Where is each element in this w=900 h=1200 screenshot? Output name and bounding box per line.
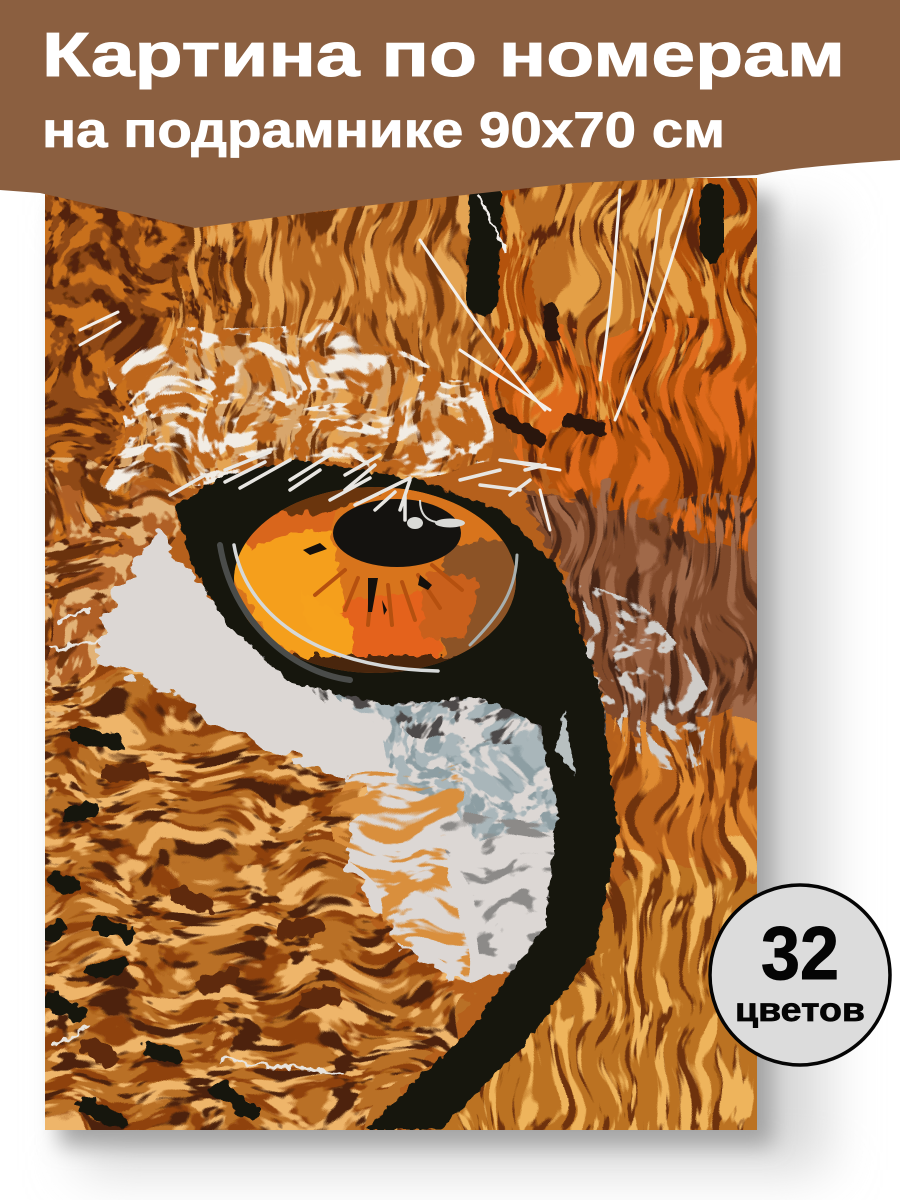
fur: lower right mottling bbox=[394, 716, 757, 1130]
eye: gray rim highlight bbox=[220, 545, 517, 680]
badge: 32 colours: цветов bbox=[735, 991, 865, 1028]
canvas shadow bbox=[60, 195, 825, 1170]
fur: pale hair strands bbox=[80, 190, 692, 530]
blue grey shading below the eye bbox=[264, 656, 606, 978]
fur: top band mottling bbox=[120, 200, 510, 490]
fur: large colour regions bbox=[30, 170, 770, 1140]
fur: black stripe and spots top bbox=[478, 195, 712, 440]
fur: brown right mid mottling bbox=[520, 490, 790, 770]
fur: cheek edge mottling bbox=[20, 470, 200, 720]
badge: 32 colours bbox=[710, 885, 890, 1065]
banner bbox=[0, 0, 900, 228]
fur: upper right mottling bbox=[480, 178, 757, 559]
title: Картина по номерам bbox=[42, 21, 845, 90]
iris radial streaks bbox=[315, 565, 462, 625]
lower cheek spots bbox=[50, 610, 340, 1122]
black eye socket and tear line bbox=[175, 460, 618, 1130]
fur: pale brow mottling bbox=[110, 320, 490, 490]
subtitle: на подрамнике 90х70 см bbox=[42, 102, 725, 158]
fur: lower left mottling bbox=[45, 664, 464, 1130]
painting: leopard eye bbox=[45, 178, 757, 1130]
fur: upper left mottling bbox=[45, 194, 252, 660]
eyelashes bbox=[170, 452, 545, 520]
eye: iris markings bbox=[303, 543, 432, 615]
badge: 32 colours: 32 bbox=[761, 911, 839, 995]
white patch under the eye bbox=[100, 530, 570, 985]
eye: iris bbox=[234, 487, 516, 673]
eye: catchlight bbox=[407, 500, 465, 529]
eye: pupil bbox=[333, 499, 461, 567]
